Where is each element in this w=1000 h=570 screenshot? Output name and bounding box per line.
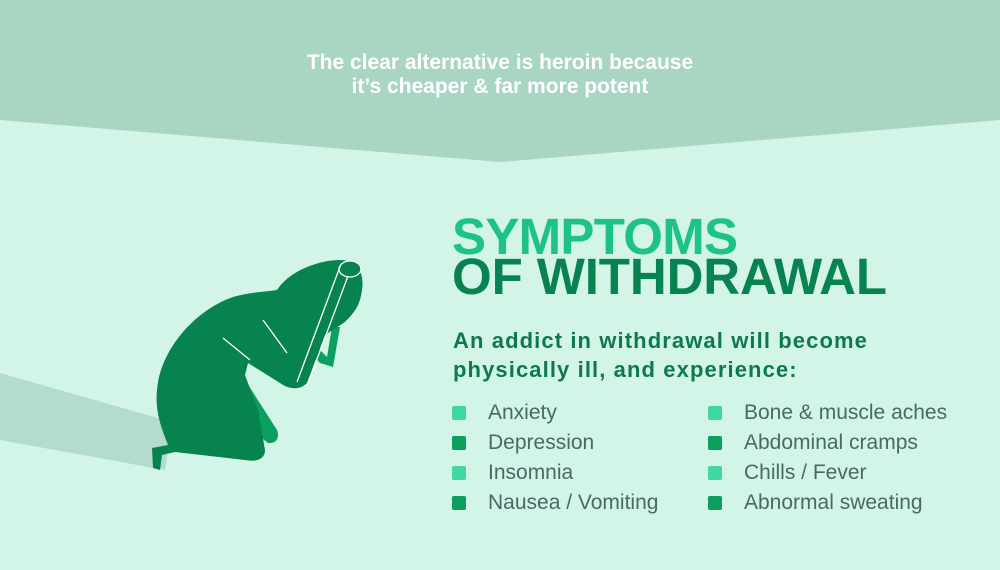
symptom list: Anxiety	[488, 401, 557, 424]
subtitle	[453, 328, 868, 382]
symptom list: Insomnia	[488, 461, 573, 484]
symptom list: Abdominal cramps	[744, 431, 918, 454]
symptom list: Nausea / Vomiting	[488, 491, 658, 514]
symptom list	[452, 401, 947, 514]
subtitle: physically ill, and experience:	[453, 357, 798, 382]
title line 2: OF WITHDRAWAL	[452, 248, 887, 305]
banner text: it’s cheaper & far more potent	[352, 75, 648, 98]
subtitle: An addict in withdrawal will become	[453, 328, 868, 353]
title: SYMPTOMS	[452, 208, 737, 265]
banner text: The clear alternative is heroin because	[307, 51, 693, 74]
figure: crouching person	[152, 260, 363, 470]
symptom list: Abnormal sweating	[744, 491, 923, 514]
symptom list: Chills / Fever	[744, 461, 867, 484]
banner text	[307, 51, 693, 98]
symptom list: Bone & muscle aches	[744, 401, 947, 424]
symptom list: Depression	[488, 431, 594, 454]
